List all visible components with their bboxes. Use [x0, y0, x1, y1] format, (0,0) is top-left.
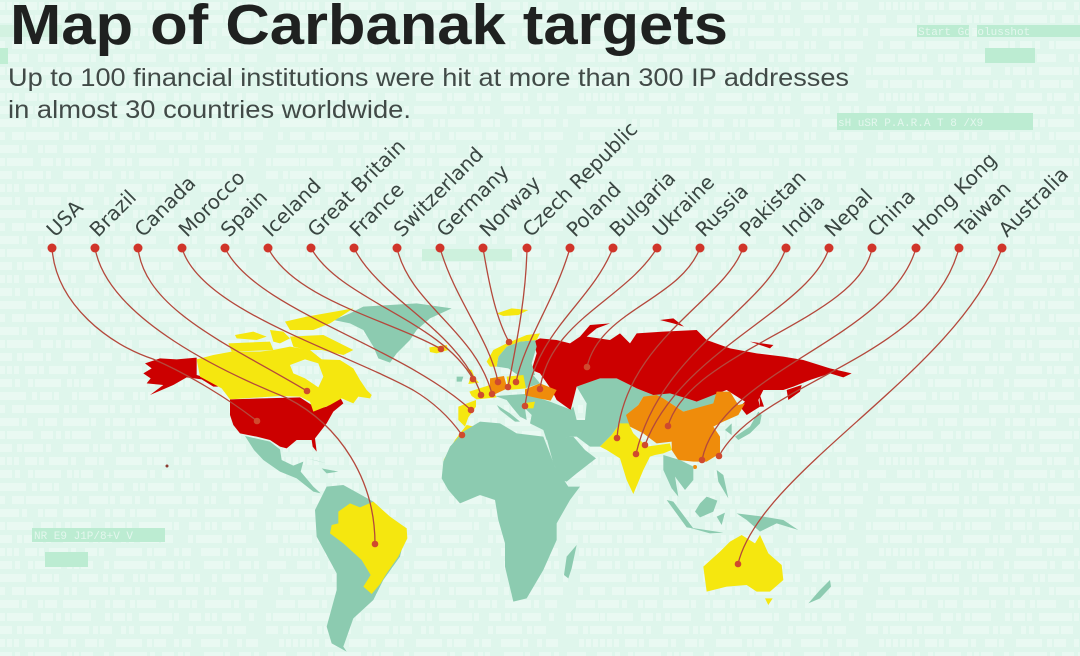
Mongolia: [643, 393, 717, 412]
map: Asia, Africa, Oceania: [442, 318, 852, 605]
Tasmania: [765, 598, 773, 605]
Canada arctic islands: [228, 308, 353, 355]
country labels: Canada: [130, 171, 200, 242]
Russia: [532, 318, 852, 415]
country labels: Taiwan: [950, 176, 1016, 242]
South America: [315, 485, 407, 652]
Arabia: [547, 437, 596, 482]
country labels: Russia: [691, 179, 753, 242]
country labels: Ukraine: [648, 170, 719, 242]
country labels: Spain: [216, 185, 272, 242]
country labels: China: [863, 184, 920, 242]
country labels: India: [778, 190, 829, 242]
connector lines from labels to countries: [52, 248, 1002, 564]
country labels: Morocco: [174, 165, 250, 242]
USA: [230, 397, 343, 452]
map: Americas (greenland, canada, usa, brazil): [143, 303, 474, 652]
country labels: France: [345, 178, 409, 242]
India and Pakistan: [600, 423, 672, 494]
country labels: Iceland: [258, 173, 326, 242]
end dots on countries: [254, 339, 741, 567]
Spain: [458, 400, 476, 427]
Alaska: [143, 358, 218, 395]
Hong Kong: [693, 465, 697, 469]
France and Switzerland: [469, 385, 497, 399]
Southeast Asia and islands: [663, 412, 798, 533]
Ukraine: [525, 383, 557, 401]
background: faint code texture: NR E9 J1P/8+V V: [34, 531, 133, 543]
Ireland: [457, 377, 463, 382]
country labels: Brazil: [85, 185, 141, 242]
country labels: Germany: [432, 159, 514, 242]
Canada mainland: [197, 347, 372, 412]
Turkey, Iran and Central Asia: [530, 378, 653, 447]
Sweden and Finland: [497, 340, 537, 377]
Hawaii: [166, 464, 168, 468]
Bulgaria: [523, 402, 535, 408]
Norway: [487, 333, 540, 367]
Mexico and Central America: [245, 436, 338, 493]
subtitle: Up to 100 financial institutions were hit at more than 300 IP addresses: [8, 64, 849, 92]
Poland and Czech Republic: [507, 375, 526, 390]
country labels: Norway: [475, 171, 545, 242]
Greenland: [333, 303, 452, 363]
Southern and eastern Europe: [495, 373, 572, 422]
map: Canada: [197, 308, 372, 412]
Svalbard: [497, 308, 528, 316]
top dots: [48, 244, 1006, 252]
country labels: Hong Kong: [908, 148, 1001, 242]
background: faint code texture: Start Gdrolusshot: [918, 27, 1030, 39]
subtitle: in almost 30 countries worldwide.: [8, 96, 411, 124]
China: [626, 392, 745, 462]
map: Europe: [457, 308, 572, 427]
country labels: Pakistan: [735, 165, 811, 242]
country labels: Poland: [562, 177, 626, 242]
Germany: [490, 376, 507, 395]
Brazil: [330, 502, 407, 594]
subtitle: [8, 64, 849, 124]
Great Britain: [467, 368, 479, 384]
country labels: Great Britain: [303, 134, 410, 242]
New Zealand: [808, 580, 831, 603]
country labels: Switzerland: [389, 142, 488, 242]
background: faint code texture: sH uSR P.A.R.A T 8 /X9: [838, 118, 983, 130]
Madagascar: [564, 545, 577, 578]
country labels: Australia: [994, 162, 1073, 242]
world map: [143, 303, 852, 652]
country labels: Bulgaria: [605, 166, 680, 242]
Australia: [703, 535, 783, 592]
country labels: [42, 117, 1073, 242]
country labels: USA: [42, 195, 88, 242]
country labels: Nepal: [820, 184, 877, 242]
Africa: [442, 422, 580, 602]
country labels: Czech Republic: [518, 117, 642, 242]
Morocco: [443, 425, 474, 461]
Iceland: [429, 345, 448, 353]
